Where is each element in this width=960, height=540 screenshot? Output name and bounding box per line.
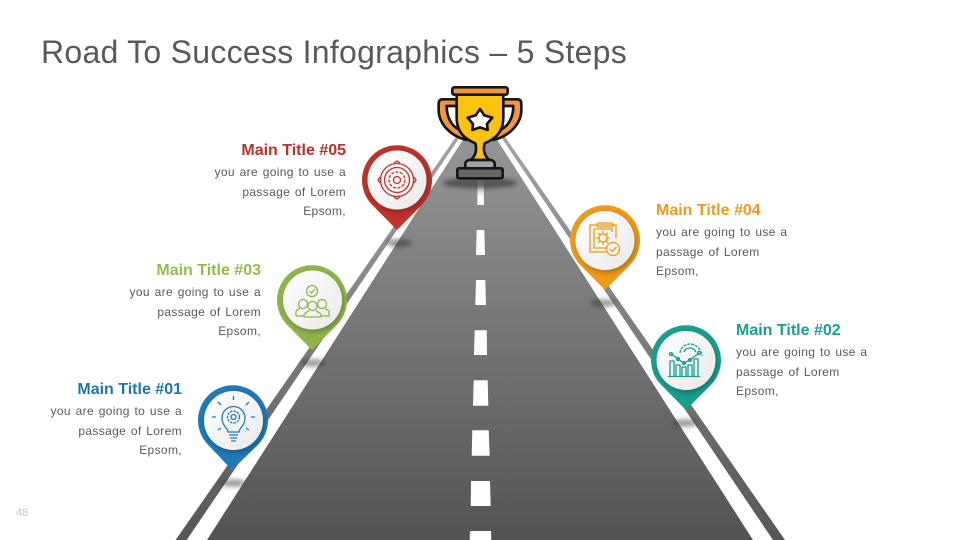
left handle — [439, 99, 467, 140]
pin: step 03 green — [277, 265, 347, 367]
cup — [457, 95, 503, 160]
text block: step 02: Main Title #02 — [736, 322, 841, 339]
pin: step 05 red — [362, 145, 432, 247]
trophy — [439, 87, 521, 188]
right handle — [493, 99, 521, 140]
icon: team with check — [296, 286, 329, 317]
text block: step 04: you are going to use a — [656, 225, 787, 239]
text block: step 03 — [130, 262, 261, 338]
text block: step 04 — [656, 202, 788, 278]
right edge line — [499, 134, 785, 540]
pin: step 01 blue — [198, 385, 268, 487]
text block: step 04: Main Title #04 — [656, 202, 761, 219]
lower base — [457, 168, 503, 178]
icon: target gear — [378, 161, 416, 199]
icon: clipboard with check — [590, 223, 620, 256]
left edge line — [176, 134, 462, 540]
text block: step 02 — [736, 322, 868, 398]
text block: step 01: you are going to use a — [51, 404, 182, 418]
road — [176, 113, 785, 540]
rim — [452, 87, 508, 95]
text block: step 01 — [50, 381, 182, 457]
text block: step 02: you are going to use a — [736, 345, 867, 359]
page number: 48 — [16, 507, 28, 519]
text block: step 03: Epsom, — [218, 324, 261, 338]
text block: step 02: passage of Lorem — [736, 365, 840, 379]
asphalt — [207, 113, 753, 540]
text block: step 01: passage of Lorem — [78, 424, 182, 438]
text block: step 01: Epsom, — [139, 443, 182, 457]
icon: light bulb gear — [212, 396, 255, 441]
text block: step 03: passage of Lorem — [157, 305, 261, 319]
text block: step 02: Epsom, — [736, 384, 779, 398]
star — [468, 109, 492, 130]
title: Road To Success Infographics – 5 Steps — [41, 34, 627, 70]
text block: step 05: Main Title #05 — [241, 142, 346, 159]
text block: step 05 — [214, 142, 346, 218]
pin: step 04 orange — [570, 205, 640, 307]
icon: bar chart with gear — [668, 344, 702, 376]
text block: step 05: you are going to use a — [215, 165, 346, 179]
text block: step 04: passage of Lorem — [656, 245, 760, 259]
text block: step 04: Epsom, — [656, 264, 699, 278]
text block: step 05: Epsom, — [303, 204, 346, 218]
text block: step 01: Main Title #01 — [77, 381, 182, 398]
trophy shadow — [443, 178, 517, 188]
text block: step 03: Main Title #03 — [156, 262, 261, 279]
text block: step 03: you are going to use a — [130, 285, 261, 299]
text block: step 05: passage of Lorem — [242, 185, 346, 199]
centre dashes — [470, 180, 491, 540]
upper base — [465, 160, 495, 168]
pin: step 02 teal — [651, 325, 721, 427]
